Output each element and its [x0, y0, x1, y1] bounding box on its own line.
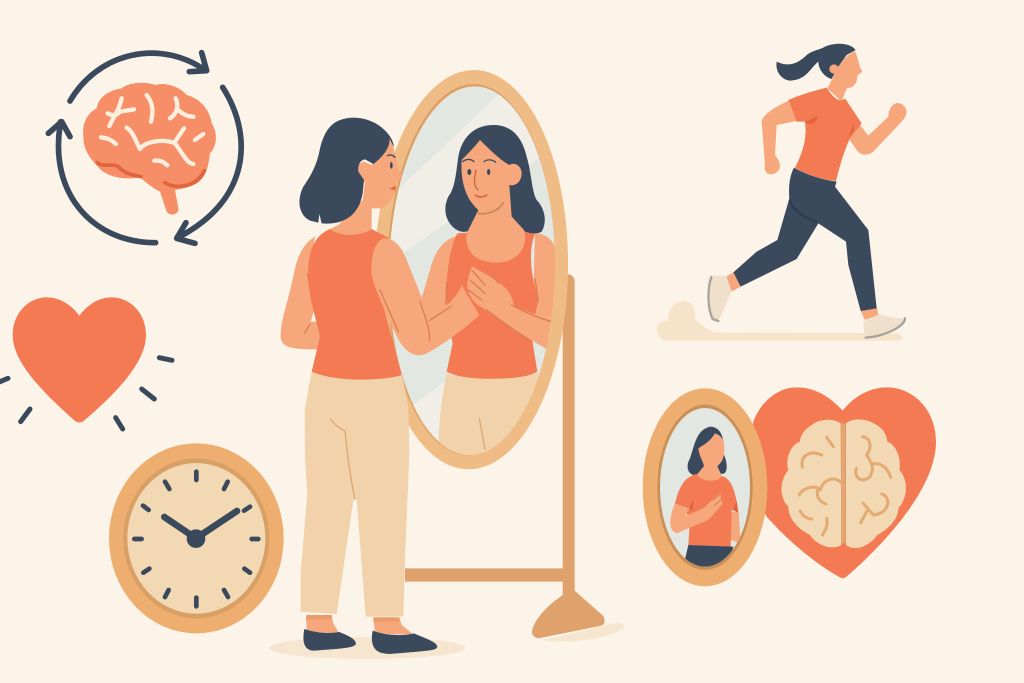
near arm: [372, 238, 479, 355]
reflected left arm: [422, 236, 456, 320]
mirror stand: [405, 274, 624, 642]
hair: [299, 118, 394, 224]
arm and hand: [670, 493, 723, 533]
reflected pants: [438, 372, 540, 455]
reflected right arm: [534, 233, 555, 324]
icon: mirror with person beside heart and brain: [643, 387, 936, 586]
clock ticks: [134, 472, 258, 606]
floor shadow: [269, 637, 465, 659]
leggings: [733, 168, 877, 311]
shoes: [303, 629, 437, 654]
mirror frame: [371, 68, 571, 471]
near arm far side: [731, 512, 741, 543]
reflected shirt: [447, 230, 538, 379]
brain: [781, 419, 906, 548]
reflected forearm and hands: [467, 266, 553, 350]
person seen from behind: [281, 118, 479, 654]
hair and ponytail: [776, 44, 856, 81]
icon: wall clock: [109, 443, 284, 633]
back arm: [762, 101, 797, 174]
small mirror reflection: [657, 407, 753, 570]
standing mirror with reflection: [281, 68, 624, 654]
neck and head: [330, 137, 402, 235]
shoes: [709, 276, 905, 338]
face and neck: [827, 51, 862, 102]
ground and dust cloud: [657, 301, 902, 341]
clock hands: [164, 511, 237, 548]
hair: [688, 427, 727, 475]
rays: [0, 358, 172, 429]
ankles: [726, 272, 878, 320]
small mirror frame: [643, 388, 767, 586]
t-shirt: [788, 88, 862, 181]
heart: [13, 297, 146, 423]
brain: [83, 83, 216, 215]
ankles: [306, 615, 414, 635]
cycle arrows: [48, 53, 241, 243]
pants: [301, 372, 409, 617]
tank top: [308, 229, 402, 380]
reflected neck and face: [461, 140, 525, 263]
pants: [683, 545, 733, 567]
reflected hair: [445, 125, 545, 233]
icon: brain with cycle arrows: [48, 53, 241, 243]
reflected scene: [390, 86, 555, 455]
front arm: [849, 103, 906, 155]
runner: [657, 44, 906, 341]
far arm: [281, 237, 320, 349]
shirt: [675, 474, 738, 547]
heart: [747, 387, 936, 578]
face and neck: [697, 433, 724, 481]
icon: glowing heart with rays: [0, 297, 172, 429]
